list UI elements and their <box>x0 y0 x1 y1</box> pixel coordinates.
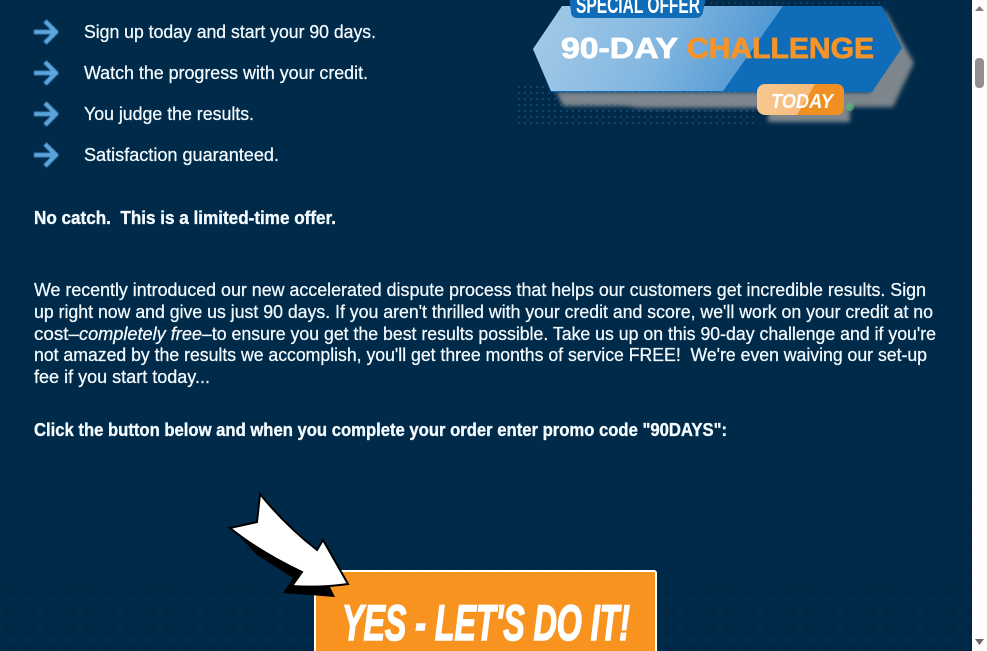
body paragraph: up right now and give us just 90 days. If you aren't thrilled with your credit and score, we'll work on your credit at no <box>34 302 933 322</box>
no catch statement: No catch. This is a limited-time offer. <box>34 208 336 228</box>
icon: arrow 4 <box>34 144 56 166</box>
body paragraph: not amazed by the results we accomplish, you'll get three months of service FREE! We're even waiving our set-up <box>34 345 927 365</box>
call-to-action button: YES - LET'S DO IT! <box>342 595 630 651</box>
list item 4: Satisfaction guaranteed. <box>84 145 279 165</box>
banner dots <box>516 84 756 128</box>
icon: arrow 3 <box>34 103 56 125</box>
scrollbar up arrow <box>975 6 984 11</box>
scrollbar <box>972 0 987 651</box>
body paragraph: completely free <box>79 324 202 344</box>
body paragraph: cost– <box>34 324 79 344</box>
scrollbar down arrow <box>975 639 984 645</box>
body paragraph: We recently introduced our new accelerated dispute process that helps our customers get incredible results. Sign <box>34 280 926 300</box>
scrollbar thumb <box>975 58 984 88</box>
body paragraph: fee if you start today... <box>34 367 210 387</box>
body paragraph: –to ensure you get the best results possible. Take us up on this 90-day challenge and if you're <box>202 324 936 344</box>
icon: white arrow pointing to button <box>230 494 348 597</box>
promo code instruction: Click the button below and when you complete your order enter promo code "90DAYS": <box>34 420 727 440</box>
banner: 90-day challenge: CHALLENGE <box>687 33 874 65</box>
banner hexagon <box>533 6 902 92</box>
call-to-action button <box>315 571 656 651</box>
icon: arrow 2 <box>34 62 56 84</box>
list item 1: Sign up today and start your 90 days. <box>84 22 376 42</box>
body paragraph <box>34 280 936 387</box>
banner title: 90-DAY <box>561 33 678 65</box>
list item 2: Watch the progress with your credit. <box>84 63 368 83</box>
special offer badge <box>568 0 708 18</box>
banner shadow <box>556 8 914 122</box>
icon: arrow 1 <box>34 21 56 43</box>
today badge <box>757 84 854 115</box>
list item 3: You judge the results. <box>84 104 254 124</box>
banner: 90-day challenge <box>516 0 914 128</box>
today badge: TODAY <box>771 91 835 113</box>
checklist <box>34 21 376 166</box>
